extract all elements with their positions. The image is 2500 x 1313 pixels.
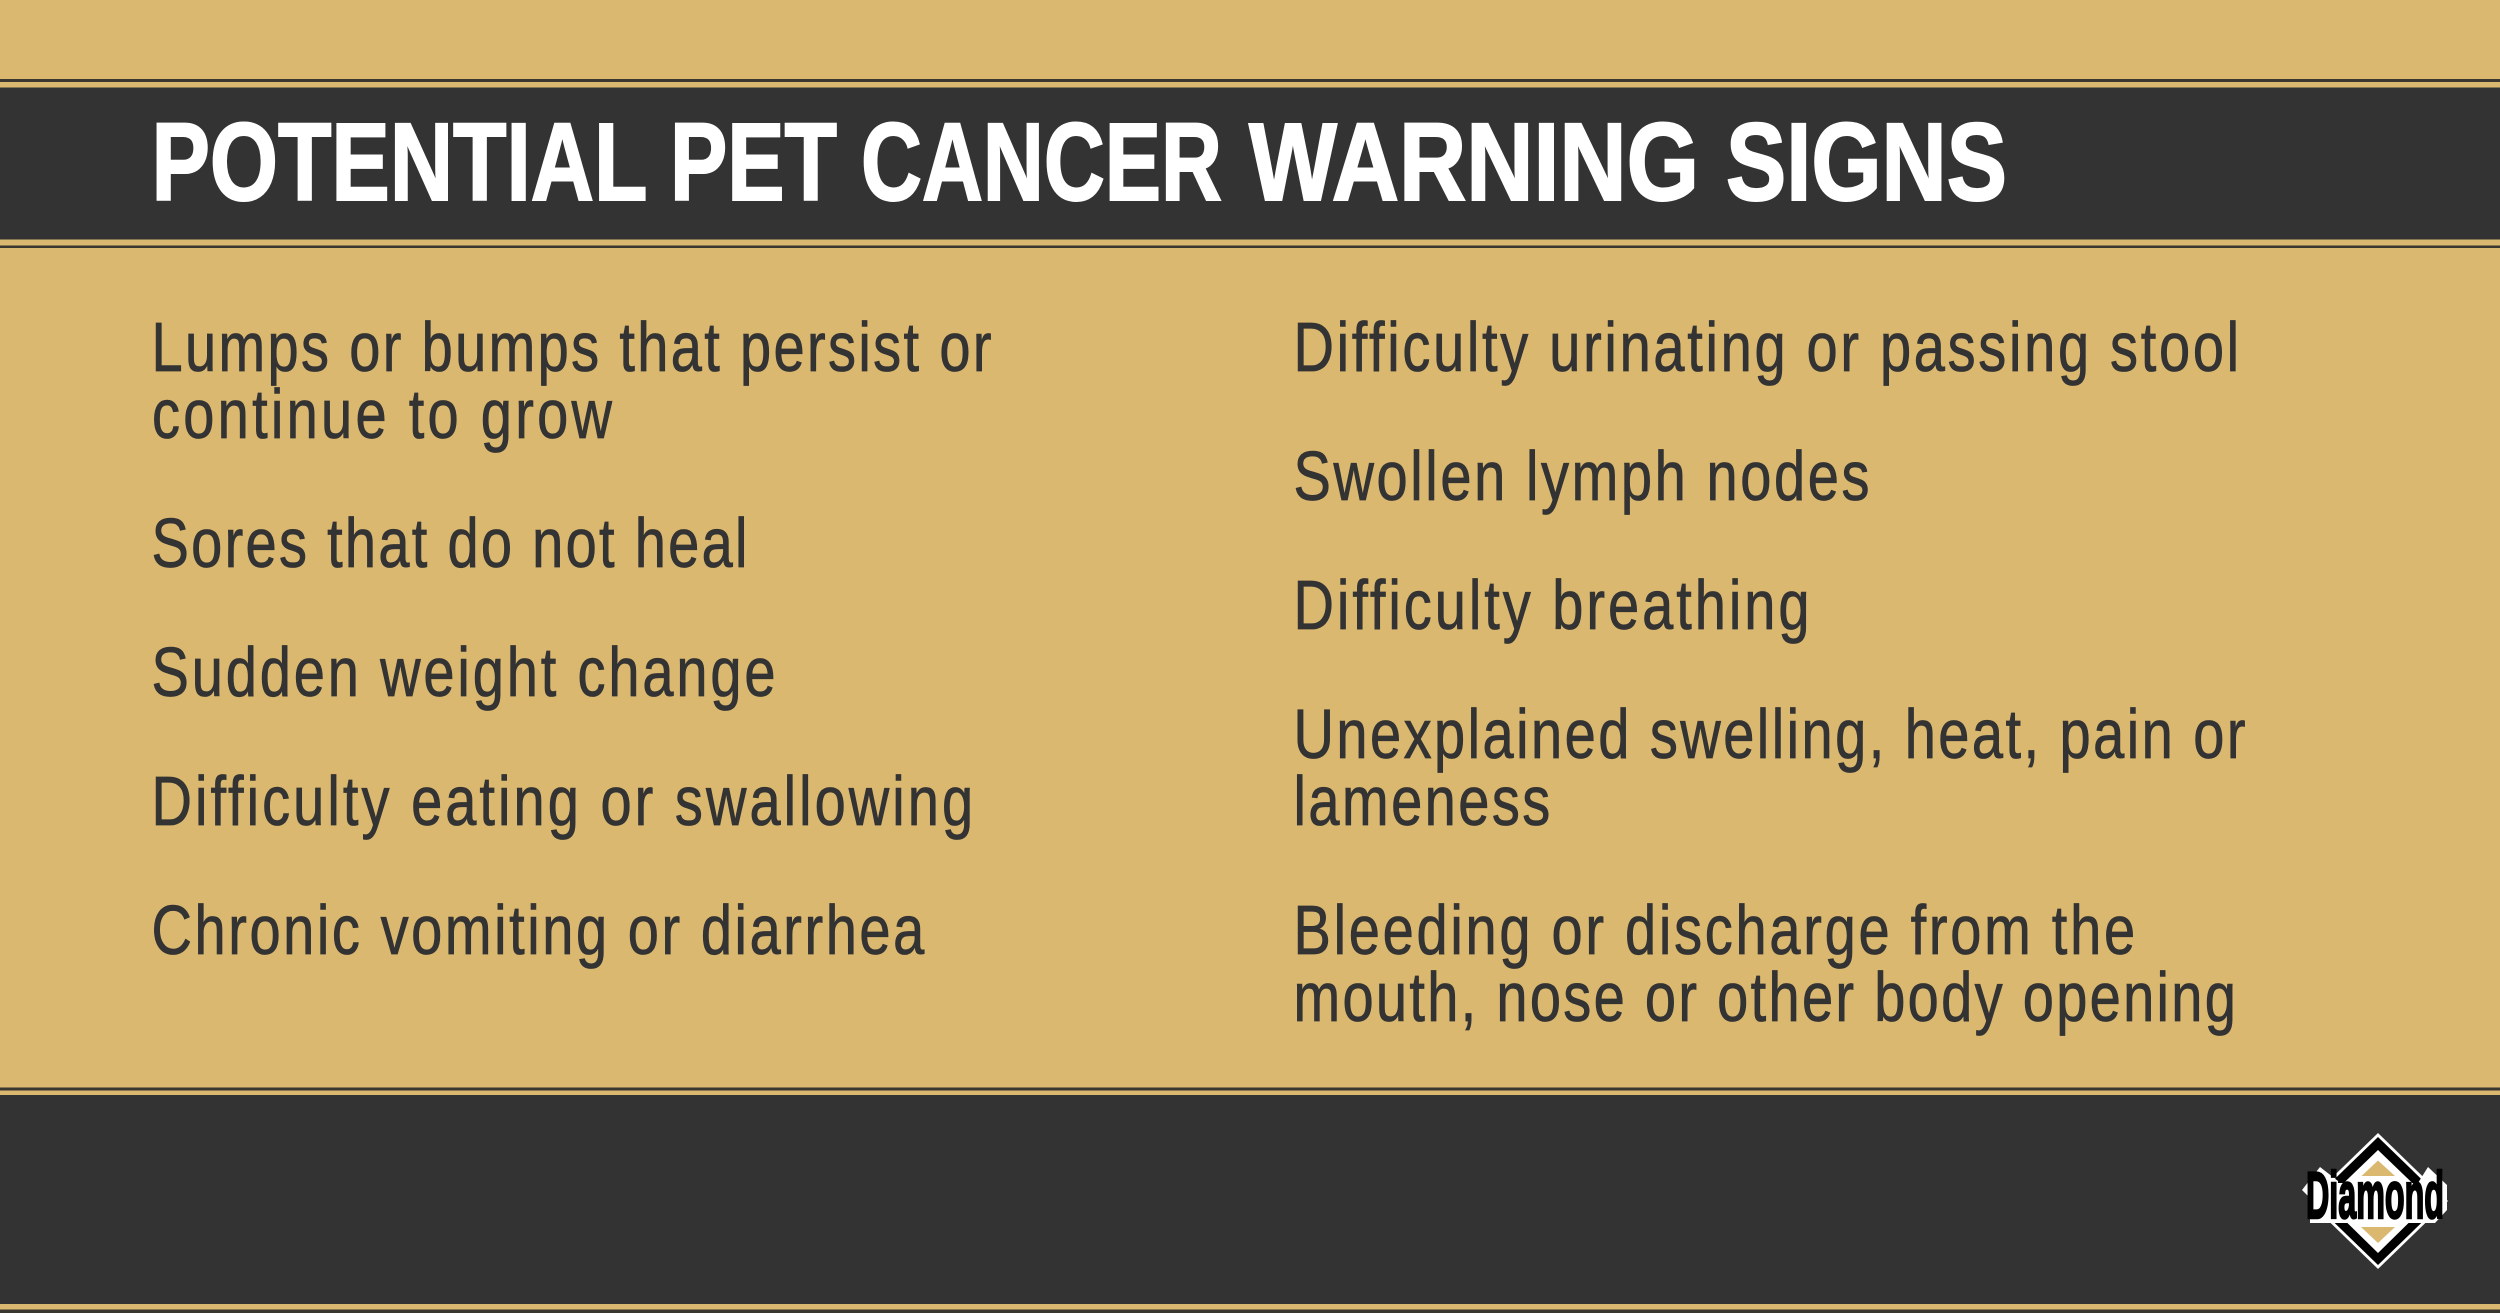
item: bleeding or discharge	[1294, 892, 2236, 1036]
item: lymph nodes: Swollen lymph nodes	[1294, 438, 1870, 515]
logo: Diamond	[2302, 1133, 2448, 1269]
left column of warning signs	[152, 309, 992, 969]
item: weight change: Sudden weight change	[152, 634, 776, 711]
item: swelling, heat, pain: lameness	[1294, 763, 1550, 840]
item: eating or swallowing: Difficulty eating or swallowing	[152, 763, 973, 840]
title: CANCER	[861, 101, 1222, 224]
item: breathing: Difficulty breathing	[1294, 567, 1810, 644]
right column of warning signs	[1294, 309, 2246, 1036]
title: POTENTIAL	[152, 101, 648, 224]
title: WARNING	[1249, 101, 1699, 224]
item: urinating or stool: Difficulty urinating or passing stool	[1294, 309, 2239, 386]
item: bleeding or discharge: mouth, nose or other body opening	[1294, 959, 2236, 1036]
title band	[0, 79, 2500, 248]
item: lumps or bumps: Lumps or bumps that persist or	[152, 309, 992, 386]
item: sores: Sores that do not heal	[152, 505, 748, 582]
item: swelling, heat, pain: Unexplained swelling, heat, pain or	[1294, 696, 2246, 773]
item: bleeding or discharge: Bleeding or discharge from the	[1294, 892, 2135, 969]
item: swelling, heat, pain	[1294, 696, 2246, 840]
item: lumps or bumps	[152, 309, 992, 453]
footer band	[0, 1088, 2500, 1313]
title	[152, 101, 2007, 224]
title: SIGNS	[1726, 101, 2007, 224]
title: PET	[670, 101, 837, 224]
item: lumps or bumps: continue to grow	[152, 376, 612, 453]
item: vomiting or diarrhea: Chronic vomiting or diarrhea	[152, 892, 925, 969]
